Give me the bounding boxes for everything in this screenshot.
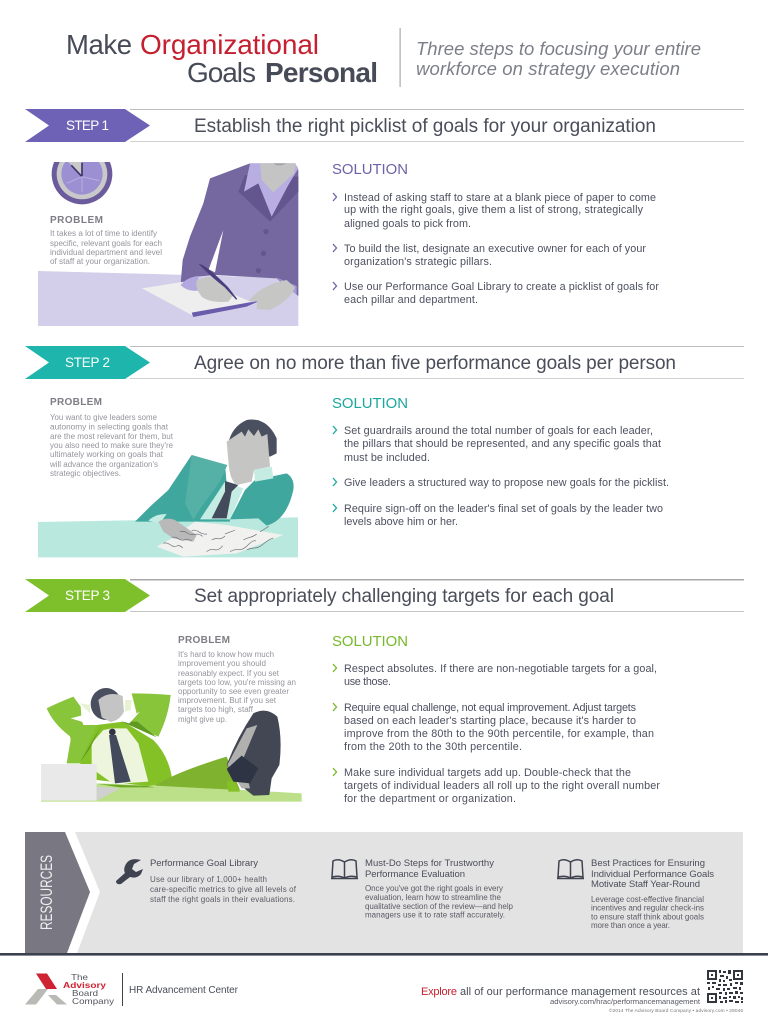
step 3 solution <box>332 634 660 805</box>
subtitle <box>400 28 701 87</box>
resource: performance goal library: staff the right goals in their evaluations. <box>150 895 295 904</box>
step 2 arrow <box>25 346 150 379</box>
step 1 solution: each pillar and department. <box>344 294 478 306</box>
step 2 problem: strategic objectives. <box>50 469 121 478</box>
step 3 illustration: relaxed person <box>41 688 302 802</box>
step 1 solution <box>332 162 659 306</box>
step 1 solution: Instead of asking staff to stare at a blank piece of paper to come <box>344 192 656 204</box>
step 2 solution: levels above him or her. <box>344 516 458 528</box>
step 1 illustration: person writing <box>38 163 298 326</box>
title: Personal <box>265 57 378 88</box>
step 2 header band <box>25 346 744 379</box>
footer call to action: ©2014 The Advisory Board Company • advisory.com • 29046 <box>609 1007 743 1014</box>
step 3 problem: opportunity to see even greater <box>178 687 289 696</box>
step 2 solution <box>332 396 669 528</box>
step 3 solution: SOLUTION <box>332 634 408 650</box>
resource: best practices: Leverage cost-effective financial <box>591 895 704 904</box>
step 1 solution: Use our Performance Goal Library to create a picklist of goals for <box>344 281 659 293</box>
step 3 problem: targets too high, staff <box>178 705 254 714</box>
step 3 solution: based on each leader's starting place, because it's harder to <box>344 715 636 727</box>
footer center name: HR Advancement Center <box>129 985 239 996</box>
resource: best practices: to ensure staff think about goals <box>591 912 704 922</box>
relaxed person leg and shoes <box>155 711 281 796</box>
step 2 illustration: stressed person <box>38 420 298 557</box>
step 1 solution: up with the right goals, give them a list of strong, strategically <box>344 204 644 216</box>
subtitle: workforce on strategy execution <box>416 58 680 79</box>
step 3 header band <box>25 579 744 612</box>
step 3 arrow <box>25 579 150 612</box>
footer logo: The <box>71 972 88 982</box>
resource: must-do steps <box>365 858 514 920</box>
footer call to action: all of our performance management resources at <box>460 986 700 998</box>
resource: performance goal library: care-specific metrics to give all levels of <box>150 885 297 894</box>
subtitle: Three steps to focusing your entire <box>416 38 701 59</box>
step 1 solution: To build the list, designate an executive owner for each of your <box>344 243 646 255</box>
step 3 problem: targets too low, you're missing an <box>178 678 296 687</box>
footer call to action: advisory.com/hrac/performancemanagement <box>550 997 701 1006</box>
resource: must-do steps: Once you've got the right goals in every <box>365 884 503 893</box>
footer logo <box>25 972 115 1006</box>
footer logo: Company <box>72 996 115 1006</box>
step 2 problem: are the most relevant for them, but <box>50 432 174 441</box>
step 3 solution: Respect absolutes. If there are non-negotiable targets for a goal, <box>344 663 657 675</box>
step 3 solution: Require equal challenge, not equal improvement. Adjust targets <box>344 702 637 714</box>
footer logo: Advisory <box>63 980 106 990</box>
step 3 solution: Make sure individual targets add up. Double-check that the <box>344 767 631 779</box>
step 1 problem: individual department and level <box>50 248 162 257</box>
resource: performance goal library: Use our library of 1,000+ health <box>150 875 267 884</box>
step 3 heading: Set appropriately challenging targets for each goal <box>194 586 614 607</box>
resource: best practices: incentives and regular check-ins <box>591 904 704 912</box>
title: Goals <box>187 57 256 88</box>
step 1 header band <box>25 109 744 142</box>
title: Make <box>66 29 132 60</box>
resource: performance goal library <box>150 858 297 904</box>
step 1 solution: aligned goals to pick from. <box>344 218 471 230</box>
step 1 arrow <box>25 109 150 142</box>
resource: must-do steps: Must-Do Steps for Trustworthy <box>365 858 494 869</box>
resource: must-do steps: evaluation, learn how to streamline the <box>365 893 502 902</box>
step 1 problem: of staff at your organization. <box>50 257 150 266</box>
resource: must-do steps: qualitative section of the review—and help <box>365 902 514 911</box>
step 2 problem: You want to give leaders some <box>50 413 158 422</box>
QR code <box>707 970 743 1003</box>
step 2 heading: Agree on no more than five performance goals per person <box>194 353 676 374</box>
resources arrow tab <box>25 832 90 953</box>
title <box>66 29 378 88</box>
step 2 problem <box>49 397 174 478</box>
step 3 solution: from the 20th to the 30th percentile. <box>344 741 522 753</box>
step 1 problem <box>50 215 162 266</box>
step 2 solution: Give leaders a structured way to propose new goals for the picklist. <box>344 477 669 489</box>
title: Organizational <box>140 29 319 60</box>
step 1 solution: organization's strategic pillars. <box>344 256 492 268</box>
step 2 problem: PROBLEM <box>50 397 102 408</box>
step 2 problem: autonomy in selecting goals that <box>50 422 169 432</box>
step 3 problem <box>178 635 296 724</box>
resource: best practices: Motivate Staff Year-Round <box>591 879 700 890</box>
resource: best practices: more than once a year. <box>591 921 670 930</box>
step 1 heading: Establish the right picklist of goals for your organization <box>194 116 656 137</box>
footer call to action <box>421 986 743 1014</box>
step 3 problem: improvement. But if you set <box>178 696 277 705</box>
step 3 arrow: STEP 3 <box>65 588 110 603</box>
step 2 solution: must be included. <box>344 452 430 464</box>
step 3 problem: It's hard to know how much <box>178 650 274 659</box>
icon: open book <box>331 860 358 878</box>
step 3 problem: reasonably expect. If you set <box>178 669 280 678</box>
icon: clock <box>52 162 112 204</box>
step 2 problem: will advance the organization's <box>49 460 158 469</box>
step 1 problem: PROBLEM <box>50 215 103 226</box>
step 2 solution: SOLUTION <box>332 396 408 412</box>
step 2 problem: you also need to make sure they're <box>50 441 174 450</box>
step 3 solution: improve from the 80th to the 90th percentile, for example, than <box>344 728 654 740</box>
step 2 solution: the pillars that should be represented, and any specific goals that <box>344 438 661 450</box>
step 3 problem: PROBLEM <box>178 635 230 646</box>
step 1 problem: It takes a lot of time to identify <box>50 229 157 238</box>
resource: best practices <box>591 858 714 930</box>
step 3 problem: improvement you should <box>178 659 266 668</box>
resources arrow tab: RESOURCES <box>37 855 56 930</box>
resource: must-do steps: Performance Evaluation <box>365 869 465 880</box>
step 3 solution: targets of individual leaders all roll up to the right overall number <box>344 780 660 792</box>
step 2 solution: Require sign-off on the leader's final set of goals by the leader two <box>344 503 663 515</box>
step 2 solution: Set guardrails around the total number of goals for each leader, <box>344 425 653 437</box>
panel: resources <box>25 832 743 953</box>
resource: must-do steps: managers use it to rate staff accurately. <box>365 910 505 920</box>
step 2 arrow: STEP 2 <box>65 355 110 370</box>
step 2 problem: ultimately working on goals that <box>50 450 164 459</box>
footer call to action: Explore <box>421 986 457 998</box>
step 3 problem: might give up. <box>178 715 227 724</box>
footer logo: Board <box>72 988 98 998</box>
icon: open book <box>557 860 584 878</box>
resource: best practices: Individual Performance Goals <box>591 869 714 880</box>
step 3 solution: for the department or organization. <box>344 793 516 805</box>
resource: performance goal library: Performance Goal Library <box>150 858 258 869</box>
step 1 arrow: STEP 1 <box>66 118 109 133</box>
icon: wrench <box>116 859 143 884</box>
resource: best practices: Best Practices for Ensuring <box>591 858 705 869</box>
step 3 solution: use those. <box>344 676 391 688</box>
step 1 solution: SOLUTION <box>332 162 408 178</box>
step 1 problem: specific, relevant goals for each <box>50 239 162 248</box>
